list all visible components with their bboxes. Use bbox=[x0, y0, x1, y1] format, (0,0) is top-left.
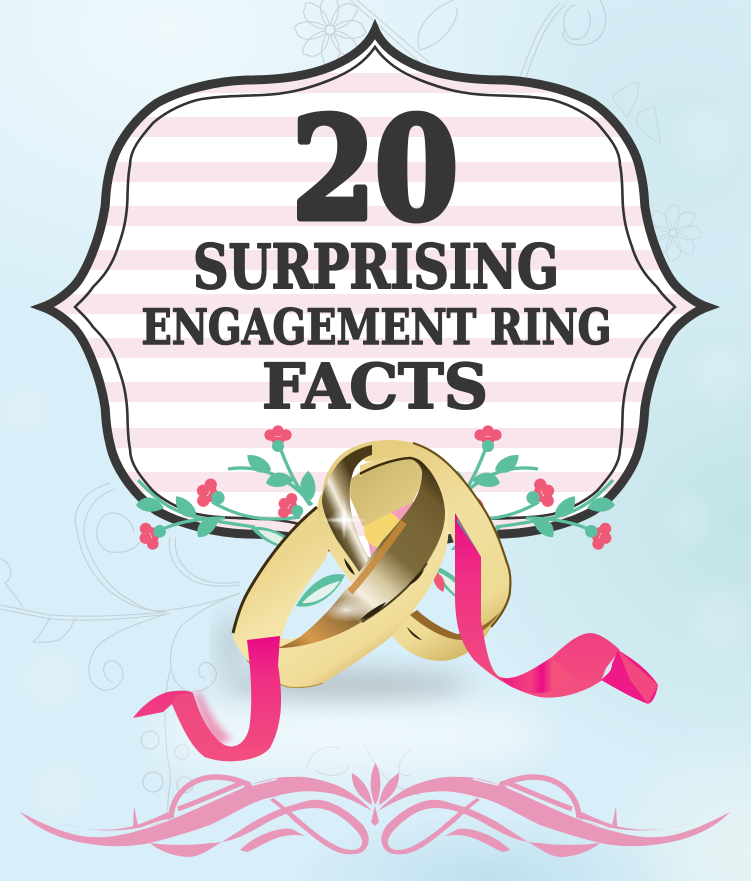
title: FACTS bbox=[262, 350, 488, 423]
white gap at top of rings bbox=[350, 458, 370, 478]
flourish center leaves bbox=[352, 763, 399, 826]
title: SURPRISING bbox=[193, 232, 559, 303]
inner thin frame line bbox=[75, 47, 675, 567]
floral sprigs right bbox=[442, 425, 617, 553]
soft shadow below rings bbox=[150, 615, 550, 775]
inner ring surface bbox=[350, 460, 422, 527]
title bbox=[142, 88, 612, 423]
floral sprigs left bbox=[134, 425, 316, 553]
frame badge with striped fill bbox=[30, 15, 720, 600]
gold wedding rings bbox=[233, 440, 510, 688]
center flower and leaves behind rings bbox=[296, 488, 484, 610]
bottom flourish ornament bbox=[20, 763, 730, 857]
outer thick frame line bbox=[43, 30, 707, 594]
flourish left half bbox=[20, 777, 372, 857]
line flower right bbox=[644, 204, 702, 262]
pink ribbon right bbox=[455, 513, 658, 704]
title: 20 bbox=[292, 88, 458, 252]
title: ENGAGEMENT RING bbox=[142, 298, 612, 356]
back portion of front ring bbox=[233, 457, 449, 688]
pink ribbon left bbox=[133, 636, 281, 761]
rear ring bbox=[317, 440, 510, 661]
rear ring dark inner band bbox=[322, 445, 374, 578]
front portion of front ring bbox=[233, 457, 449, 688]
flourish right half bbox=[378, 777, 730, 857]
line flower top bbox=[294, 0, 366, 66]
ring reflections and sparkles bbox=[320, 498, 424, 640]
